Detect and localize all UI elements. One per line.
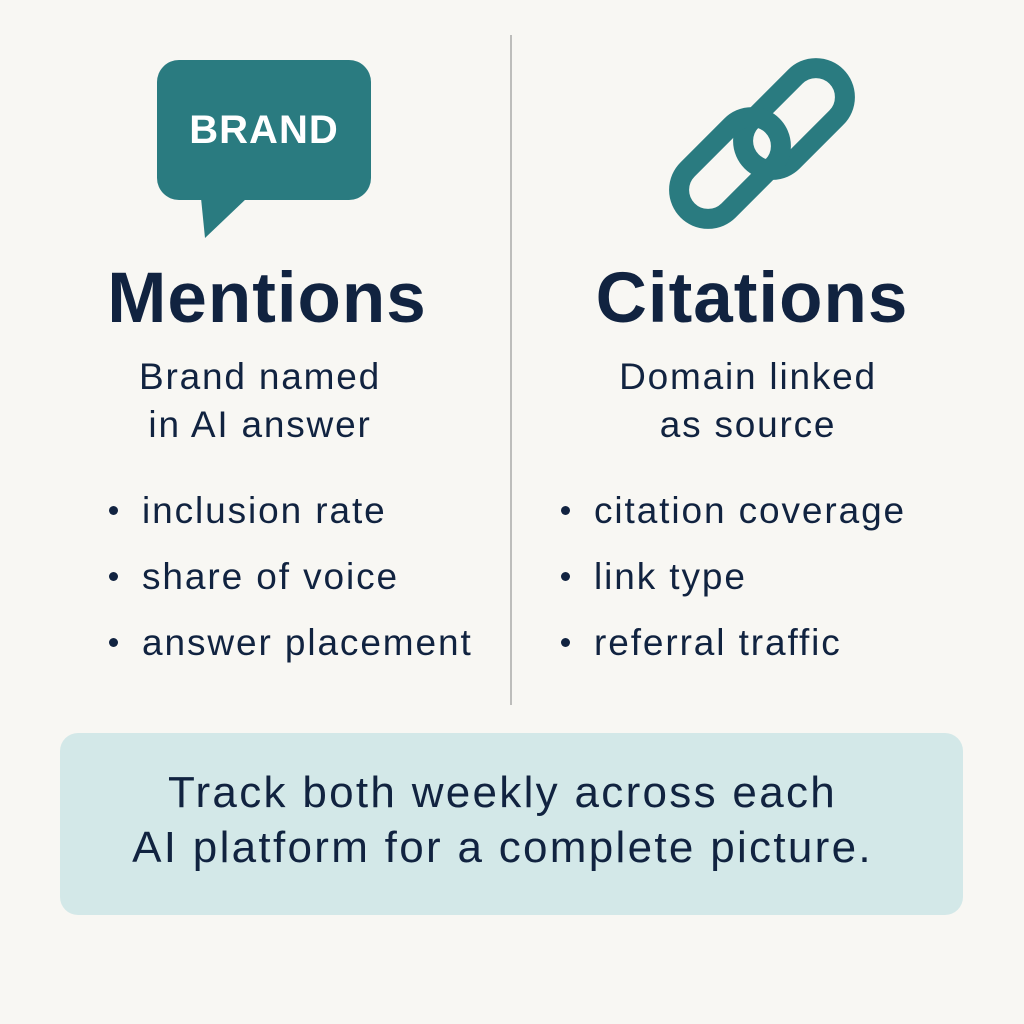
text: citations subtitle: as source (660, 404, 836, 445)
list: citations metrics: citation coverage (594, 490, 906, 531)
list: citations metrics: link type (594, 556, 747, 597)
callout text (132, 768, 873, 872)
list: citations metrics (561, 490, 906, 663)
list: mentions metrics: share of voice (142, 556, 399, 597)
text: citations subtitle (619, 356, 877, 445)
list: citations metrics: referral traffic (594, 622, 842, 663)
callout box (60, 733, 963, 915)
callout text: Track both weekly across each (168, 768, 837, 817)
list: mentions metrics: inclusion rate (142, 490, 387, 531)
text: mentions subtitle (139, 356, 381, 445)
list: mentions metrics: answer placement (142, 622, 473, 663)
list: mentions metrics (109, 490, 473, 663)
text: mentions subtitle: in AI answer (148, 404, 372, 445)
divider (510, 35, 512, 705)
text: mentions subtitle: Brand named (139, 356, 381, 397)
icon: speech bubble BRAND (157, 60, 371, 238)
icon: speech bubble BRAND: BRAND (189, 108, 339, 152)
text: citations subtitle: Domain linked (619, 356, 877, 397)
callout text: AI platform for a complete picture. (132, 823, 873, 872)
heading: Citations: Citations (596, 259, 908, 338)
heading: Mentions: Mentions (107, 259, 427, 338)
icon: chain link (669, 58, 855, 229)
